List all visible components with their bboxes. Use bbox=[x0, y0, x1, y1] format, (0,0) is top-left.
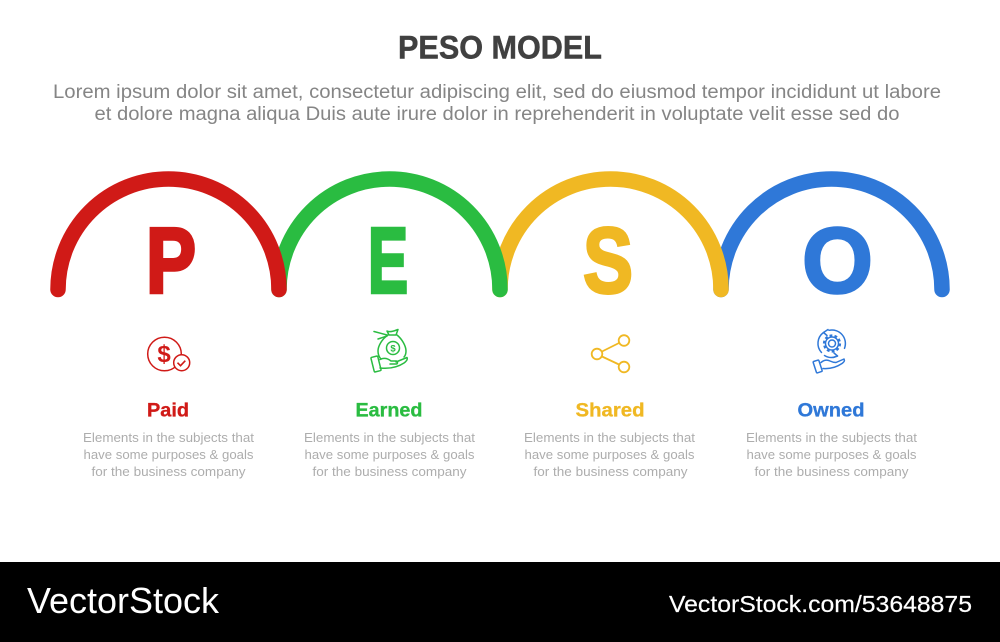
column text: Shared: for the business company bbox=[534, 464, 688, 479]
column text: Shared: Elements in the subjects that bbox=[524, 430, 695, 445]
letter S: S bbox=[583, 208, 633, 312]
column text: Earned: Elements in the subjects that bbox=[304, 430, 475, 445]
footer bar: VectorStock.com/53648875 bbox=[669, 591, 972, 617]
column text: Paid: for the business company bbox=[92, 464, 246, 479]
icon: money bag on hand bbox=[371, 330, 407, 372]
icon: money bag on hand: $ bbox=[390, 344, 396, 354]
column text: Owned: have some purposes & goals bbox=[746, 447, 917, 462]
letter P: P bbox=[146, 208, 196, 312]
intro text: Lorem ipsum dolor sit amet, consectetur adipiscing elit, sed do eiusmod tempor incididunt ut labore bbox=[53, 82, 941, 103]
column heading: Earned: Earned bbox=[356, 400, 422, 422]
column text: Owned: for the business company bbox=[754, 464, 909, 479]
letter O: O bbox=[802, 208, 873, 312]
intro text bbox=[53, 82, 941, 125]
column text: Paid: Elements in the subjects that bbox=[83, 430, 254, 445]
column text: Owned bbox=[746, 430, 917, 479]
icon: share nodes bbox=[592, 335, 629, 372]
letter E: E bbox=[368, 208, 408, 312]
column text: Owned: Elements in the subjects that bbox=[746, 430, 917, 445]
icon: dollar coin with check bbox=[148, 337, 190, 371]
footer bar bbox=[0, 562, 1000, 642]
title: PESO MODEL bbox=[398, 30, 602, 66]
semicircle arcs bbox=[58, 179, 942, 290]
column text: Earned bbox=[304, 430, 475, 479]
column text: Earned: for the business company bbox=[312, 464, 467, 479]
column heading: Owned: Owned bbox=[798, 400, 864, 422]
column text: Shared bbox=[524, 430, 695, 479]
icon: gear on hand bbox=[813, 330, 845, 373]
footer bar: VectorStock bbox=[27, 580, 220, 621]
column text: Shared: have some purposes & goals bbox=[524, 447, 695, 462]
column text: Earned: have some purposes & goals bbox=[304, 447, 475, 462]
column text: Paid bbox=[83, 430, 254, 479]
intro text: et dolore magna aliqua Duis aute irure dolor in reprehenderit in voluptate velit esse sed do bbox=[94, 104, 899, 125]
icon: dollar coin with check: $ bbox=[157, 341, 171, 368]
column heading: Shared: Shared bbox=[576, 400, 644, 422]
column heading: Paid: Paid bbox=[147, 400, 189, 422]
column text: Paid: have some purposes & goals bbox=[84, 447, 254, 462]
